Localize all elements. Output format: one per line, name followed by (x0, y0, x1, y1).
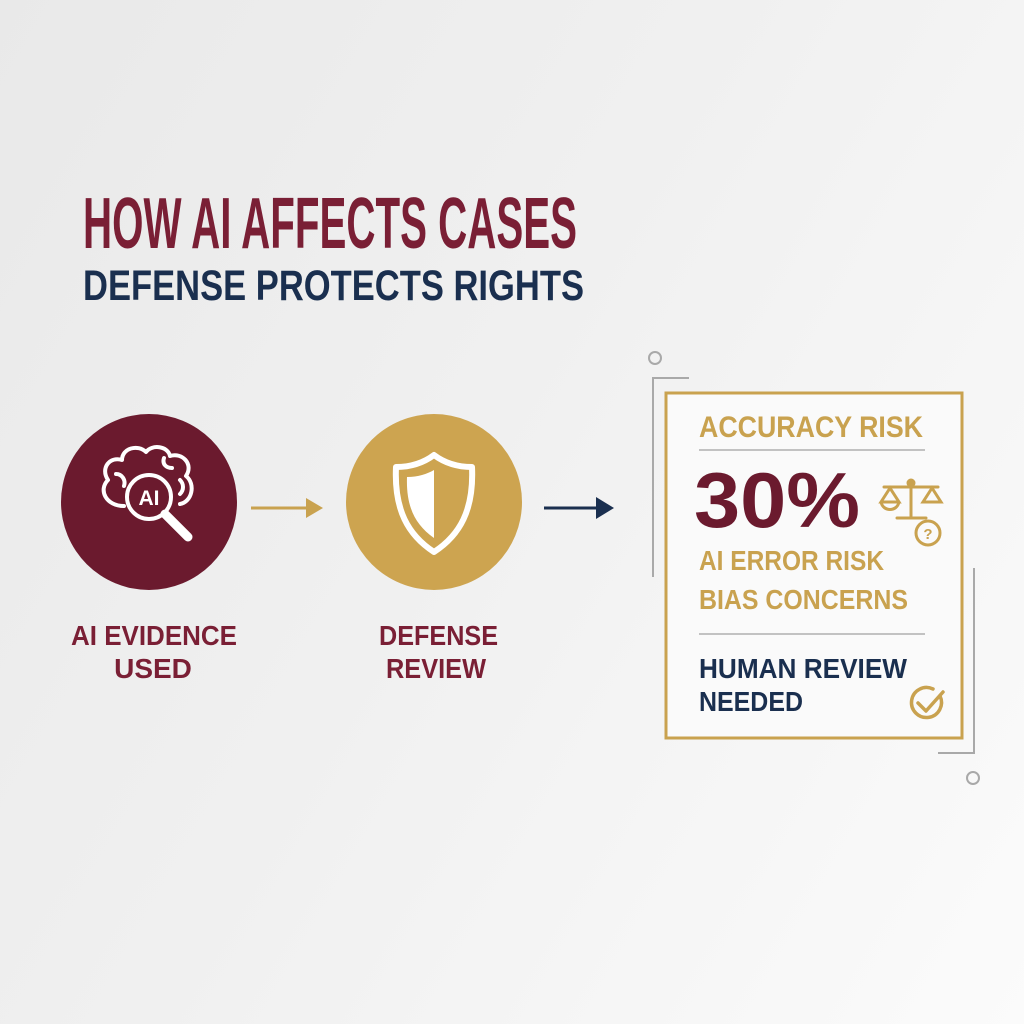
label: AI evidence used: AI EVIDENCE (71, 620, 237, 651)
label: defense review: DEFENSE (379, 620, 498, 651)
icon: scales with question (881, 480, 941, 545)
stat: 30%: 30% (694, 456, 860, 544)
label: AI evidence used: USED (114, 653, 192, 684)
label: defense review: REVIEW (386, 653, 487, 684)
decorative brackets (649, 352, 979, 784)
icon: shield (396, 455, 472, 552)
text: risks: AI ERROR RISK (699, 545, 884, 576)
panel: accuracy risk (666, 393, 962, 738)
label: AI evidence used (71, 620, 237, 684)
step 2: defense review circle (346, 414, 522, 590)
subtitle: DEFENSE PROTECTS RIGHTS (83, 262, 584, 310)
label: defense review (379, 620, 498, 684)
arrow: navy (544, 497, 614, 519)
arrow: gold (251, 498, 323, 518)
icon: brain with magnifier (104, 447, 192, 537)
text: human review needed: HUMAN REVIEW (699, 653, 908, 684)
step 1: AI evidence circle: AI (138, 487, 160, 510)
panel: accuracy risk: NEEDED (699, 686, 803, 717)
panel: accuracy risk: ? (923, 526, 933, 543)
title: HOW AI AFFECTS CASES (83, 184, 577, 264)
panel: accuracy risk: BIAS CONCERNS (699, 584, 908, 615)
step 1: AI evidence circle (61, 414, 237, 590)
heading: accuracy risk: ACCURACY RISK (699, 411, 923, 444)
icon: check circle (911, 688, 943, 718)
